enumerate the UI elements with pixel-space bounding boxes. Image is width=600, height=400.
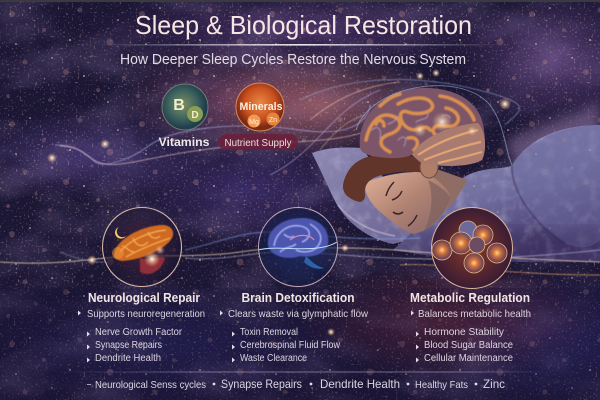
- bullet list: Blood Sugar Balance: [424, 340, 513, 351]
- footer strip: Dendrite Health: [320, 377, 400, 391]
- nutrient supply pill: [218, 134, 298, 150]
- column: brain detoxification: [220, 291, 368, 364]
- nutrient: minerals: Minerals: [240, 101, 282, 113]
- column: neurological repair: [78, 291, 205, 364]
- bullet list: [220, 310, 341, 364]
- neck: [425, 165, 468, 215]
- footer strip: [87, 377, 505, 391]
- footer strip: Healthy Fats: [415, 379, 468, 391]
- bullet list: Waste Clearance: [240, 353, 307, 364]
- bullet list: Nerve Growth Factor: [95, 327, 183, 338]
- blanket: [390, 120, 600, 268]
- panel art: metabolic regulation: [432, 208, 512, 288]
- lead bullet: Clears waste via glymphatic flow: [228, 308, 368, 320]
- bullet list: Toxin Removal: [240, 327, 298, 338]
- closed eye, brow and lips: [386, 182, 417, 226]
- bullet list: [78, 310, 183, 364]
- bullet list: Cerebrospinal Fluid Flow: [240, 340, 341, 351]
- bullet list: Hormone Stability: [424, 327, 504, 338]
- bullet list: Cellular Maintenance: [424, 353, 513, 364]
- nutrient: vitamins: D: [191, 110, 199, 121]
- pillow: [312, 148, 412, 244]
- heading: Neurological Repair: [88, 291, 200, 305]
- footer strip: Neurological Senss cycles: [95, 379, 206, 391]
- nutrient: vitamins: [158, 84, 210, 149]
- flowing energy wisps, lower: [0, 232, 600, 275]
- brain: [360, 88, 485, 166]
- bullet list: Synapse Repairs: [95, 340, 162, 351]
- hair: [343, 154, 440, 202]
- nutrient: minerals: [236, 83, 284, 131]
- nutrient: minerals: Zn: [269, 117, 277, 124]
- ear: [420, 156, 438, 178]
- nutrient: minerals: Mg: [249, 119, 259, 126]
- bullet list: [411, 310, 513, 364]
- title: Sleep & Biological Restoration: [135, 10, 472, 40]
- heading: Brain Detoxification: [242, 291, 354, 305]
- sleeping man: [310, 86, 600, 268]
- column: metabolic regulation: [410, 291, 531, 364]
- heading: Metabolic Regulation: [410, 291, 530, 305]
- glowing sparks: [47, 69, 511, 336]
- lead bullet: Supports neuroregeneration: [87, 308, 205, 320]
- footer strip: Synapse Repairs: [221, 377, 302, 391]
- nutrient supply pill: Nutrient Supply: [224, 138, 292, 149]
- nutrient: vitamins: B: [173, 97, 185, 114]
- flowing energy wisps, upper: [55, 79, 520, 175]
- subtitle: How Deeper Sleep Cycles Restore the Nervous System: [120, 51, 466, 68]
- nutrient: vitamins: Vitamins: [158, 135, 210, 149]
- bullet list: Dendrite Health: [95, 353, 161, 364]
- panel art: brain detoxification: [258, 208, 340, 286]
- lead bullet: Balances metabolic health: [418, 308, 531, 320]
- footer strip: Zinc: [483, 379, 505, 391]
- panel art: neurological repair: [102, 208, 182, 286]
- face: [365, 172, 450, 234]
- cloud band behind sleeper: [505, 100, 600, 170]
- translucent halo around head: [356, 86, 512, 165]
